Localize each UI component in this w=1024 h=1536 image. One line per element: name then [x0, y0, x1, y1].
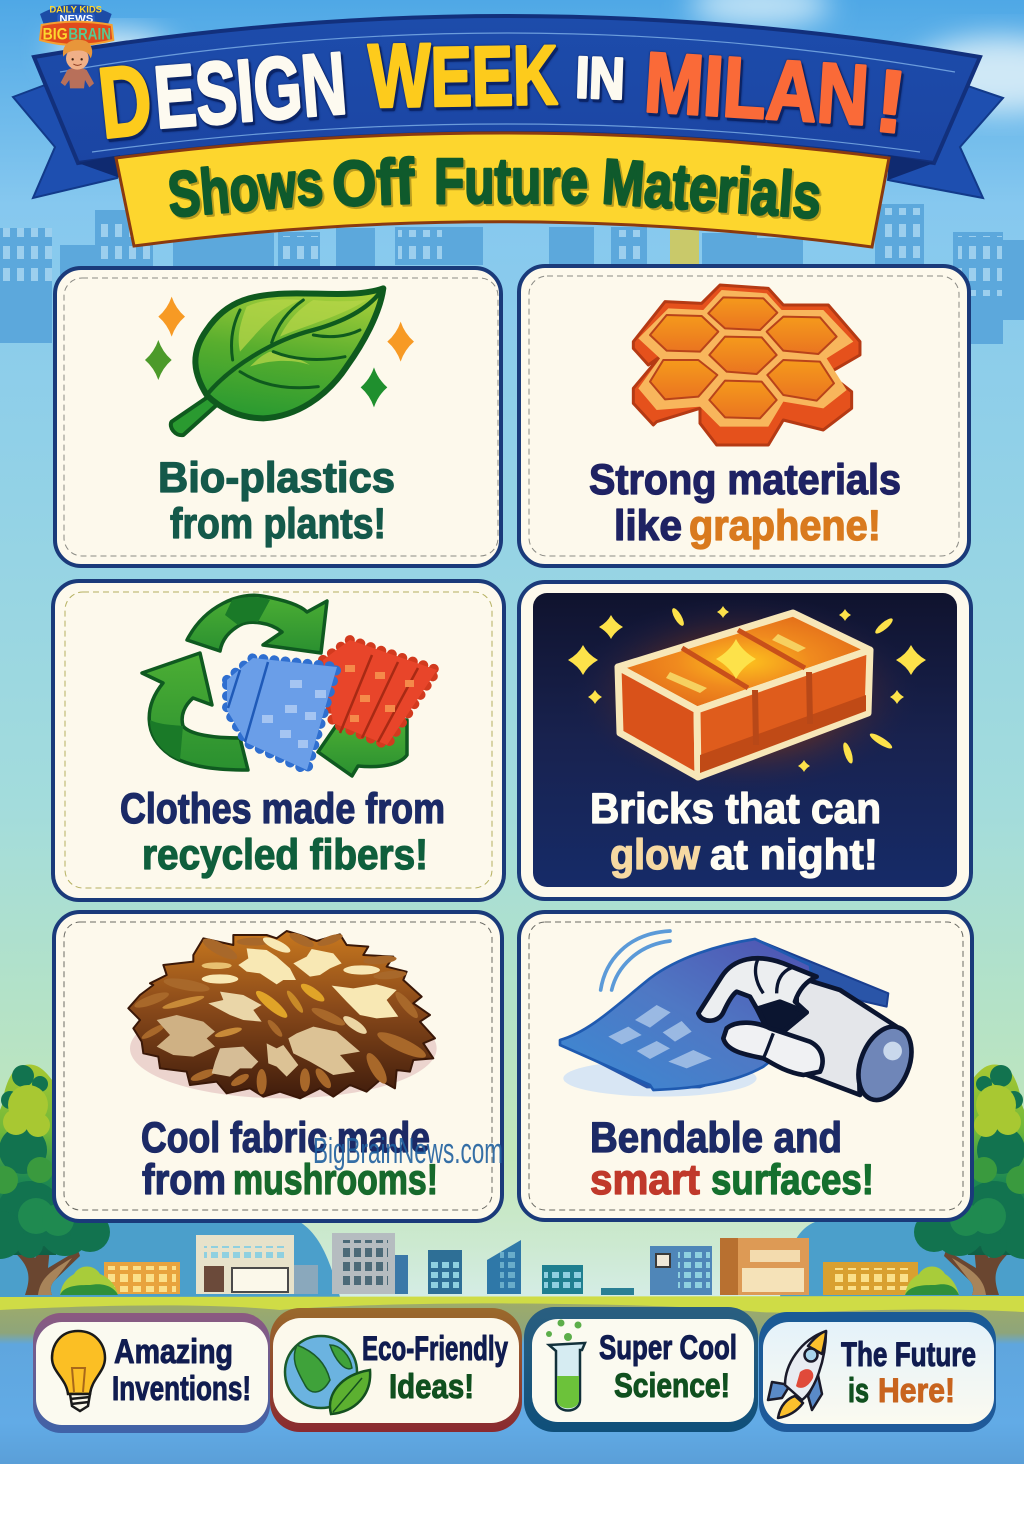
- badge: Eco-Friendly Ideas: [270, 1308, 522, 1432]
- caption: Bendable and smart surfaces!: smart: [590, 1156, 700, 1204]
- icon: rocket: [768, 1331, 826, 1418]
- label: Super Cool: [599, 1329, 737, 1367]
- label: Here!: [878, 1372, 955, 1410]
- label: Eco-Friendly: [362, 1330, 508, 1368]
- panel: glowing bricks: [519, 582, 971, 899]
- background: blue hills behind low city: [0, 1222, 1024, 1297]
- label: Ideas!: [389, 1368, 474, 1406]
- caption: Cool fabric made from mushrooms!: from: [142, 1156, 226, 1204]
- banner: ribbon tails: [13, 85, 1003, 198]
- icon: test tube: [546, 1320, 585, 1410]
- caption: Bricks that can glow at night!: at night!: [710, 831, 878, 879]
- icon: mushroom fabric patch: [128, 930, 437, 1098]
- title: DESIGN WEEK IN MILAN!: WEEK: [368, 24, 558, 127]
- label: Amazing: [114, 1333, 233, 1371]
- panel: recycled clothes: [53, 581, 504, 900]
- subtitle: Shows Off Future Materials: Shows: [165, 146, 326, 231]
- caption: Bio-plastics from plants!: Bio-plastics: [158, 454, 395, 502]
- title: DESIGN WEEK IN MILAN!: !: [871, 50, 911, 152]
- label: [112, 1333, 251, 1408]
- panel: strong materials: [519, 266, 969, 566]
- badge: Amazing Inventions: [33, 1313, 270, 1433]
- badge: The Future is Here: [759, 1312, 996, 1432]
- caption: Bio-plastics from plants!: [158, 454, 395, 548]
- banner: blue arch: [34, 16, 980, 163]
- caption: Clothes made from recycled fibers!: Clothes made from: [120, 785, 445, 833]
- watermark: BigBrainNews.com: BigBrainNews.com: [313, 1130, 503, 1171]
- icon: robot hand bending a smart sheet: [560, 931, 922, 1108]
- caption: Bendable and smart surfaces!: Bendable and: [590, 1114, 842, 1162]
- banner: ribbon folds: [78, 155, 934, 180]
- banner: yellow subtitle ribbon: [116, 133, 889, 247]
- panel: bendable smart surfaces: [519, 912, 972, 1220]
- badge: Super Cool Science: [524, 1307, 758, 1432]
- panel: mushroom fabric: [54, 912, 503, 1221]
- icon: glowing brick with sparkles: [568, 595, 926, 795]
- title: DESIGN WEEK IN MILAN!: MILAN: [642, 35, 871, 144]
- subtitle: Shows Off Future Materials: Materials: [600, 145, 824, 232]
- background: city skyline: [0, 204, 1024, 344]
- label: [599, 1329, 737, 1405]
- caption: Clothes made from recycled fibers!: recycled fibers!: [142, 831, 428, 879]
- icon: recycling arrows and fabric: [142, 595, 437, 776]
- label: Inventions!: [112, 1370, 251, 1408]
- panel: bio-plastics: [55, 268, 501, 566]
- caption: Bricks that can glow at night!: glow: [610, 831, 700, 879]
- icon: light bulb: [52, 1331, 105, 1411]
- caption: Strong materials like graphene!: Strong materials: [589, 456, 901, 504]
- background: lawn and blue base: [0, 1296, 1024, 1464]
- caption: Clothes made from recycled fibers!: [120, 785, 445, 879]
- caption: Strong materials like graphene!: [589, 456, 901, 550]
- title: DESIGN WEEK IN MILAN!: [94, 24, 911, 160]
- label: Science!: [614, 1367, 730, 1405]
- logo: Daily Kids News Big Brain: BIG: [43, 24, 68, 43]
- caption: Bricks that can glow at night!: Bricks that can: [590, 785, 881, 833]
- caption: Bendable and smart surfaces!: [590, 1114, 874, 1204]
- caption: Strong materials like graphene!: like: [614, 502, 682, 550]
- label: The Future: [841, 1336, 976, 1374]
- background: left tree: [0, 1065, 110, 1295]
- subtitle: Shows Off Future Materials: Future: [434, 145, 588, 217]
- icon: orange honeycomb: [633, 285, 860, 445]
- caption: Bendable and smart surfaces!: surfaces!: [711, 1156, 874, 1204]
- title: DESIGN WEEK IN MILAN!: D: [94, 43, 157, 160]
- subtitle: Shows Off Future Materials: [165, 145, 824, 232]
- icon: globe with leaf: [285, 1336, 370, 1414]
- caption: Bio-plastics from plants!: from plants!: [170, 500, 386, 548]
- logo: Daily Kids News Big Brain: BRAIN: [68, 24, 111, 43]
- caption: Cool fabric made from mushrooms!: mushrooms!: [233, 1156, 438, 1204]
- logo: Daily Kids News Big Brain: NEWS: [59, 14, 94, 25]
- caption: Cool fabric made from mushrooms!: Cool fabric made: [141, 1114, 430, 1162]
- icon detail: robot hand: [698, 958, 922, 1108]
- banner: inner highlight line: [60, 33, 955, 152]
- title: DESIGN WEEK IN MILAN!: IN: [575, 45, 626, 112]
- caption: Bricks that can glow at night!: [590, 785, 881, 879]
- caption: Strong materials like graphene!: graphene!: [689, 502, 881, 550]
- label: [841, 1336, 976, 1410]
- caption: Cool fabric made from mushrooms!: [141, 1114, 438, 1204]
- logo: Daily Kids News Big Brain: DAILY KIDS: [49, 5, 102, 15]
- background: right tree: [914, 1065, 1024, 1295]
- logo: Daily Kids News Big Brain: [40, 4, 113, 88]
- subtitle: Shows Off Future Materials: Off: [331, 145, 416, 220]
- label: is: [848, 1372, 869, 1410]
- icon: green leaf with sparkles: [145, 288, 414, 435]
- background: low city buildings: [60, 1233, 959, 1295]
- logo: mascot: [61, 40, 94, 88]
- title banner: [13, 16, 1003, 247]
- title: DESIGN WEEK IN MILAN!: ESIGN: [151, 33, 350, 147]
- label: [362, 1330, 508, 1406]
